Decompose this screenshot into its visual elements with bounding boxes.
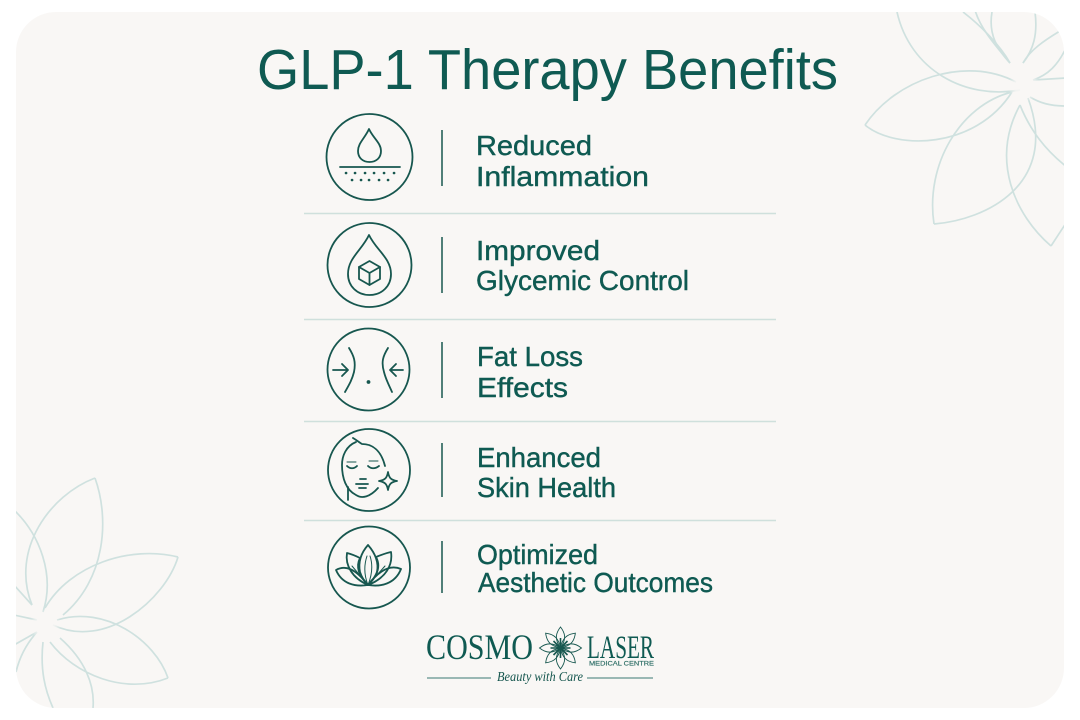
logo flower mark [540, 627, 582, 669]
label: Fat Loss Effects: Fat Loss [477, 341, 583, 372]
label: Optimized Aesthetic Outcomes: Optimized [477, 539, 598, 570]
logo: Cosmo Laser Medical Centre [426, 627, 654, 685]
label: Improved Glycemic Control: Improved [476, 235, 600, 266]
decorative flower: top right [865, 10, 1068, 246]
icon: face with sparkle [328, 429, 410, 511]
label: Reduced Inflammation: Reduced [476, 130, 592, 161]
icon: waist with arrows [328, 328, 410, 410]
label: Reduced Inflammation: Inflammation [476, 161, 649, 192]
label: Optimized Aesthetic Outcomes [477, 539, 713, 598]
icon: water drop on skin [326, 114, 412, 200]
divider [441, 130, 443, 186]
logo: Cosmo Laser Medical Centre: Beauty with Care [497, 670, 583, 685]
label: Enhanced Skin Health [477, 442, 616, 503]
title: GLP-1 Therapy Benefits [257, 38, 838, 102]
decorative flower: bottom left [14, 478, 178, 708]
logo: Cosmo Laser Medical Centre: MEDICAL CENTRE [589, 662, 654, 668]
label: Enhanced Skin Health: Enhanced [477, 442, 601, 473]
icon: lotus [328, 526, 410, 608]
label: Fat Loss Effects: Effects [477, 372, 568, 403]
label: Enhanced Skin Health: Skin Health [477, 472, 616, 503]
label: Improved Glycemic Control [476, 235, 689, 296]
logo: Cosmo Laser Medical Centre: COSMO [426, 627, 533, 667]
label: Optimized Aesthetic Outcomes: Aesthetic Outcomes [478, 567, 713, 598]
label: Reduced Inflammation [476, 130, 649, 192]
label: Improved Glycemic Control: Glycemic Control [476, 265, 689, 296]
icon: glucose drop [328, 223, 412, 307]
logo: Cosmo Laser Medical Centre: LASER [587, 630, 654, 666]
label: Fat Loss Effects [477, 341, 583, 403]
